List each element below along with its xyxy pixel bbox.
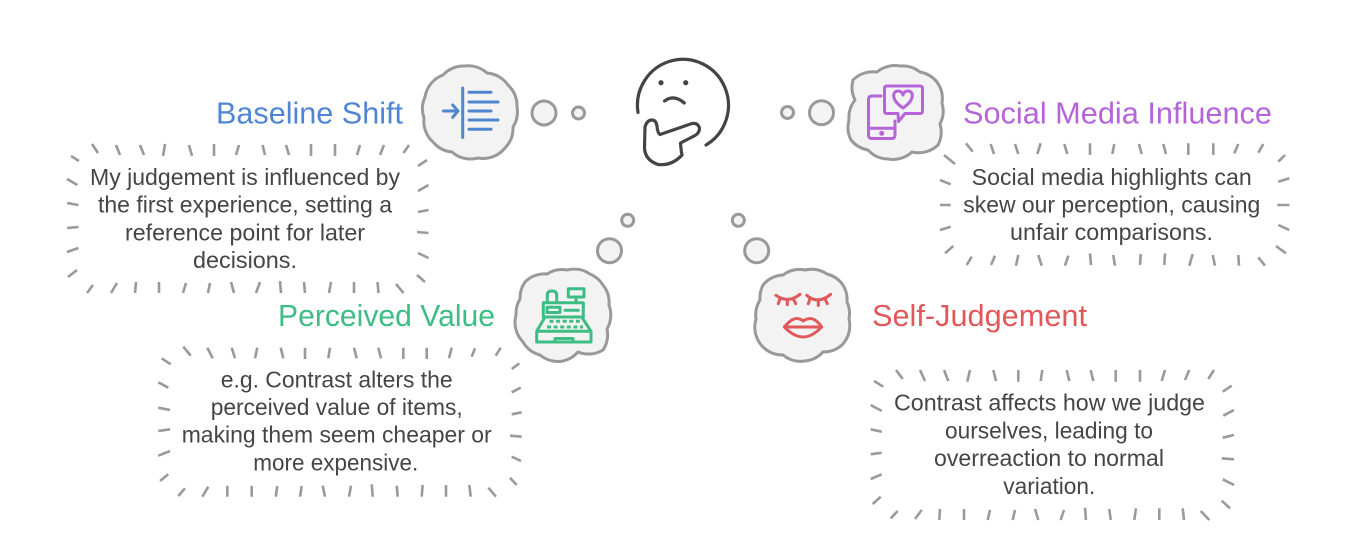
- panel: Baseline Shift: [67, 66, 517, 293]
- text: Baseline Shift description: decisions.: [193, 247, 297, 273]
- text: Self-Judgement description: [894, 390, 1205, 499]
- text: Perceived Value description: making them seem cheaper or: [182, 422, 492, 448]
- panel: Social Media Influence: [848, 66, 1289, 266]
- icon: cash register in thought cloud: [515, 269, 611, 361]
- text: Self-Judgement description: variation.: [1003, 473, 1095, 499]
- icon: phone with heart message in thought cloud: [848, 66, 943, 159]
- text: Social Media Influence description: unfair comparisons.: [1010, 219, 1213, 245]
- text: Perceived Value description: e.g. Contrast alters the: [221, 367, 453, 393]
- dashed tick frame: [940, 143, 1289, 266]
- connector bubbles: Perceived Value: [598, 214, 634, 263]
- text: Baseline Shift description: [90, 164, 400, 273]
- text: Self-Judgement description: Contrast affects how we judge: [894, 390, 1205, 416]
- heading: Social Media Influence: Social Media Influence: [963, 96, 1272, 130]
- text: Social Media Influence description: skew our perception, causing: [963, 192, 1260, 218]
- text: Self-Judgement description: overreaction to normal: [934, 445, 1164, 471]
- icon: indent in thought cloud: [422, 66, 517, 159]
- heading: Baseline Shift: Baseline Shift: [216, 96, 404, 130]
- heading: Self-Judgement: Self-Judgement: [872, 299, 1088, 333]
- heading: Perceived Value: Perceived Value: [278, 299, 495, 333]
- text: Self-Judgement description: ourselves, leading to: [945, 417, 1153, 443]
- dashed tick frame: [871, 370, 1234, 520]
- text: Baseline Shift description: the first experience, setting a: [98, 192, 392, 218]
- connector bubbles: Social Media Influence: [782, 101, 834, 125]
- text: Perceived Value description: more expensive.: [253, 450, 418, 476]
- text: Perceived Value description: perceived value of items,: [211, 394, 463, 420]
- panel: Self-Judgement: [755, 269, 1234, 520]
- icon: closed eyes and lips in thought cloud: [755, 269, 850, 361]
- panel: Perceived Value: [158, 269, 611, 497]
- text: Social Media Influence description: [963, 164, 1260, 245]
- connector bubbles: Baseline Shift: [532, 101, 584, 125]
- dashed tick frame: [67, 144, 428, 293]
- icon: thinking face: [637, 59, 728, 165]
- dashed tick frame: [158, 347, 522, 497]
- text: Baseline Shift description: My judgement is influenced by: [90, 164, 400, 190]
- connector bubbles: Self-Judgement: [732, 214, 769, 263]
- text: Baseline Shift description: reference point for later: [125, 219, 365, 245]
- text: Social Media Influence description: Social media highlights can: [972, 164, 1252, 190]
- text: Perceived Value description: [182, 367, 492, 476]
